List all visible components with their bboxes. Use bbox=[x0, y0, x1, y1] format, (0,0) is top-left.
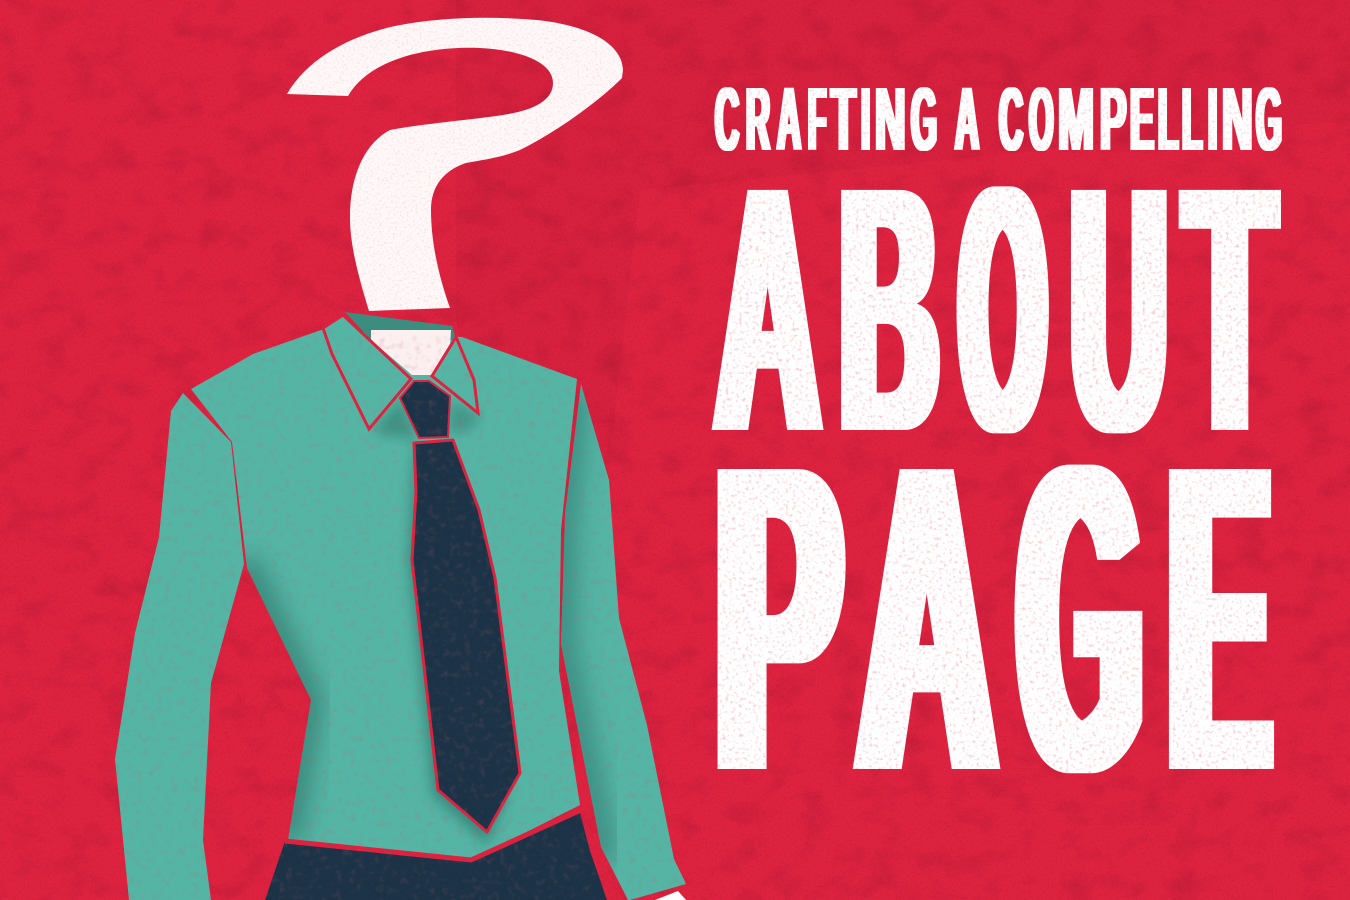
hem line bbox=[285, 810, 581, 860]
figure wearing shirt and tie bbox=[110, 310, 690, 900]
heading: About: T bbox=[1185, 114, 1274, 504]
heading: Crafting a compelling: L bbox=[1158, 70, 1178, 170]
heading: About: O bbox=[960, 114, 1046, 504]
heading: Crafting a compelling bbox=[714, 70, 1282, 170]
tie knot bbox=[400, 381, 450, 438]
heading: Crafting a compelling: O bbox=[1029, 70, 1053, 170]
heading: Page: E bbox=[1170, 375, 1269, 862]
heading: Crafting a compelling: G bbox=[1256, 70, 1282, 170]
heading: Crafting a compelling: C bbox=[715, 70, 739, 170]
heading: Crafting a compelling: A bbox=[777, 70, 801, 170]
heading: Crafting a compelling: F bbox=[808, 70, 826, 170]
right collar bbox=[432, 337, 478, 413]
heading: Crafting a compelling: P bbox=[1100, 70, 1126, 170]
right sleeve bbox=[561, 384, 686, 900]
neck opening and white collar band bbox=[345, 312, 456, 375]
heading: Page: A bbox=[859, 375, 994, 862]
heading: Crafting a compelling: L bbox=[1182, 70, 1202, 170]
fabric wear texture bbox=[110, 310, 690, 900]
heading: Crafting a compelling: G bbox=[911, 70, 937, 170]
shirt cuff bbox=[655, 891, 686, 900]
left sleeve bbox=[115, 393, 244, 900]
tie bbox=[412, 440, 520, 832]
heading: Crafting a compelling: I bbox=[1208, 70, 1217, 170]
heading: Crafting a compelling: E bbox=[1130, 70, 1154, 170]
heading: Crafting a compelling: N bbox=[1222, 70, 1252, 170]
heading: Page: P bbox=[716, 375, 841, 862]
torso bbox=[191, 330, 580, 859]
heading: Page bbox=[716, 375, 1274, 862]
heading: About: A bbox=[716, 114, 819, 504]
heading: Crafting a compelling: M bbox=[1058, 70, 1094, 170]
heading: Crafting a compelling: C bbox=[999, 70, 1023, 170]
left collar bbox=[323, 315, 411, 429]
question mark head bbox=[280, 10, 630, 315]
heading: Crafting a compelling: T bbox=[831, 70, 856, 170]
heading: Crafting a compelling: A bbox=[955, 70, 979, 170]
heading: About: U bbox=[1071, 114, 1166, 504]
heading: About: B bbox=[840, 114, 938, 504]
trousers bbox=[265, 813, 607, 900]
heading: Crafting a compelling: R bbox=[746, 70, 770, 170]
heading: About bbox=[712, 114, 1281, 504]
heading: Crafting a compelling: I bbox=[861, 70, 870, 170]
heading: Crafting a compelling: N bbox=[875, 70, 906, 170]
heading: Page: G bbox=[1018, 375, 1141, 862]
